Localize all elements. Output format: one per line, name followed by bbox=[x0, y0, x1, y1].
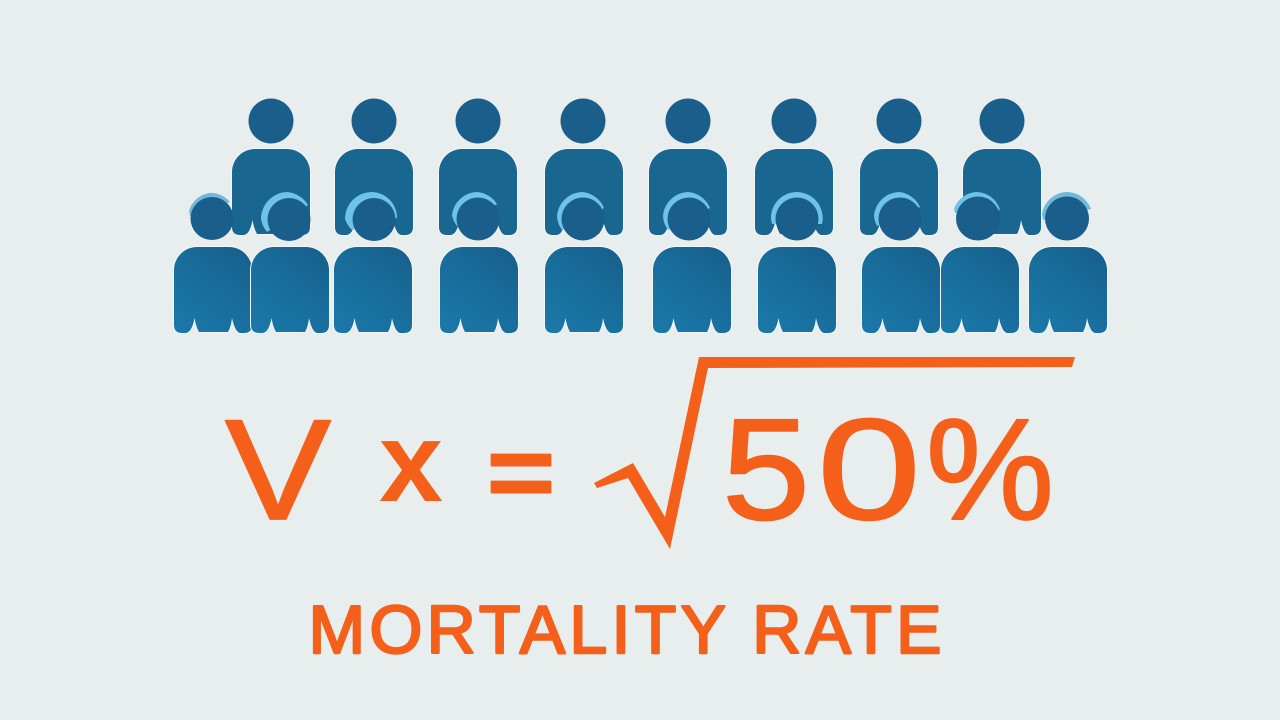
value 50%: 0 bbox=[817, 389, 921, 550]
person: front 3 bbox=[334, 192, 412, 333]
person: back 6 bbox=[755, 98, 833, 235]
person: front 1 bbox=[174, 193, 252, 333]
front row of people bbox=[174, 192, 1107, 333]
formula symbol V: V bbox=[225, 391, 331, 550]
person: back 4 bbox=[545, 98, 623, 235]
person: front 9 bbox=[941, 192, 1019, 333]
person: back 1 bbox=[232, 98, 310, 235]
equals sign: = bbox=[487, 417, 555, 529]
value 50% bbox=[722, 389, 1054, 550]
person: back 3 bbox=[439, 98, 517, 235]
person: back 5 bbox=[649, 98, 727, 235]
multiplication x: x bbox=[379, 399, 443, 525]
value 50%: 5 bbox=[722, 389, 810, 550]
person: front 8 bbox=[862, 192, 940, 333]
person: front 5 bbox=[545, 192, 623, 333]
person: front 6 bbox=[653, 192, 731, 333]
value 50%: % bbox=[926, 389, 1054, 550]
person: back 7 bbox=[860, 98, 938, 235]
person: front 4 bbox=[440, 192, 518, 333]
person: back 2 bbox=[335, 98, 413, 235]
person: front 2 bbox=[251, 192, 329, 333]
person: front 7 bbox=[758, 192, 836, 333]
formula bbox=[225, 357, 1075, 550]
back row of people bbox=[232, 98, 1041, 235]
caption: mortality rate: MORTALITY RATE bbox=[308, 592, 942, 668]
person: back 8 bbox=[963, 98, 1041, 235]
people group icon bbox=[174, 98, 1107, 333]
radical sign bbox=[594, 357, 1075, 549]
person: front 10 bbox=[1029, 192, 1107, 333]
